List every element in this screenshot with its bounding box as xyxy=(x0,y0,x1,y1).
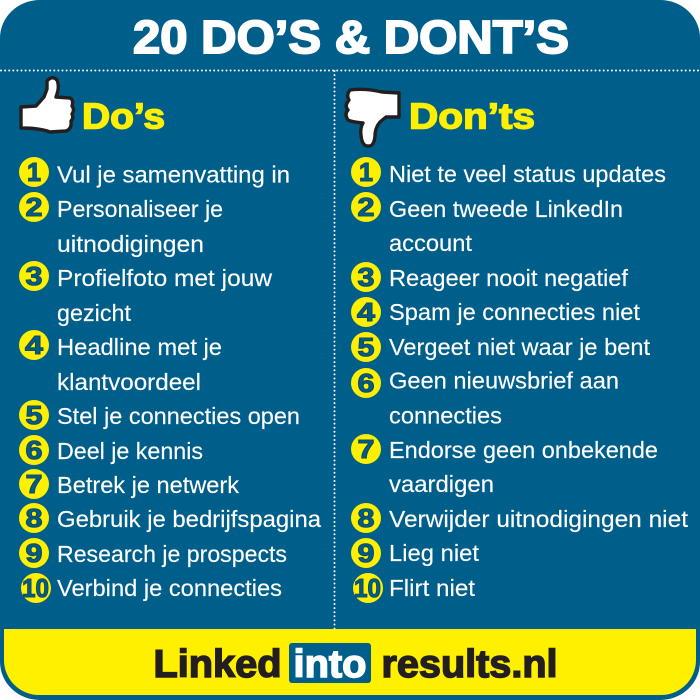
item 7 xyxy=(351,434,658,497)
item 9: Lieg niet xyxy=(389,540,480,566)
item 8: 8 xyxy=(26,503,42,533)
item 2: Personaliseer je xyxy=(57,196,223,222)
icon: thumbs up xyxy=(21,78,74,132)
item 3: 3 xyxy=(26,261,42,291)
item 6: Deel je kennis xyxy=(57,438,203,464)
item 8: Verwijder uitnodigingen niet xyxy=(389,506,689,532)
item 6 xyxy=(19,435,203,465)
item 3: 3 xyxy=(358,262,374,292)
logo: into box: into xyxy=(294,643,366,686)
item 2: 2 xyxy=(26,192,42,222)
item 6: 6 xyxy=(358,368,374,398)
item 7: Betrek je netwerk xyxy=(57,472,239,498)
icon: thumbs down xyxy=(346,89,399,146)
item 3: Reageer nooit negatief xyxy=(389,265,629,291)
item 9: 9 xyxy=(358,538,374,568)
item 3: gezicht xyxy=(57,300,132,326)
logo: Linked: Linked xyxy=(154,643,282,686)
item 6: connecties xyxy=(389,402,502,428)
item 8: Gebruik je bedrijfspagina xyxy=(57,506,321,532)
item 2: uitnodigingen xyxy=(57,231,204,257)
title: 20 DO’S & DONT’S xyxy=(133,11,569,63)
item 1: Vul je samenvatting in xyxy=(57,162,290,188)
item 2: account xyxy=(389,230,473,256)
item 7: Endorse geen onbekende xyxy=(389,437,658,463)
item 2: 2 xyxy=(358,192,374,222)
item 1: 1 xyxy=(27,157,41,187)
item 9: Research je prospects xyxy=(57,541,287,567)
item 4 xyxy=(19,330,222,395)
item 3: Profielfoto met jouw xyxy=(57,265,272,291)
item 5: Vergeet niet waar je bent xyxy=(389,334,651,360)
footer banner xyxy=(4,629,696,695)
item 3 xyxy=(19,261,272,326)
heading: don'ts: Don’ts xyxy=(409,96,535,136)
item 2: Geen tweede LinkedIn xyxy=(389,196,623,222)
item 5: 5 xyxy=(358,332,374,362)
item 10: Flirt niet xyxy=(389,575,476,601)
item 2 xyxy=(19,192,223,257)
item 9: 9 xyxy=(26,538,42,568)
item 7 xyxy=(19,469,239,499)
item 9 xyxy=(351,538,480,568)
item 10 xyxy=(353,573,476,603)
item 8: 8 xyxy=(358,503,374,533)
heading: do's: Do’s xyxy=(82,96,165,136)
panel: don'ts xyxy=(346,89,689,603)
item 4: 4 xyxy=(25,330,44,360)
item 10: Verbind je connecties xyxy=(57,575,282,601)
item 6: Geen nieuwsbrief aan xyxy=(389,368,619,394)
item 7: vaardigen xyxy=(389,471,494,497)
item 5: 5 xyxy=(26,400,42,430)
item 2 xyxy=(351,192,623,256)
item 7: 7 xyxy=(358,434,374,464)
item 4: Headline met je xyxy=(57,334,222,360)
item 6: 6 xyxy=(26,435,42,465)
item 4: 4 xyxy=(357,297,376,327)
item 10: 10 xyxy=(354,573,381,603)
item 1: 1 xyxy=(359,157,373,187)
item 1: Niet te veel status updates xyxy=(389,161,666,187)
item 5: Stel je connecties open xyxy=(57,403,300,429)
item 4: klantvoordeel xyxy=(57,369,201,395)
item 10: 10 xyxy=(22,573,49,603)
panel: do's xyxy=(19,78,321,603)
logo: results.nl: results.nl xyxy=(382,643,558,686)
item 4: Spam je connecties niet xyxy=(389,299,641,325)
item 7: 7 xyxy=(26,469,42,499)
item 6 xyxy=(351,368,619,428)
